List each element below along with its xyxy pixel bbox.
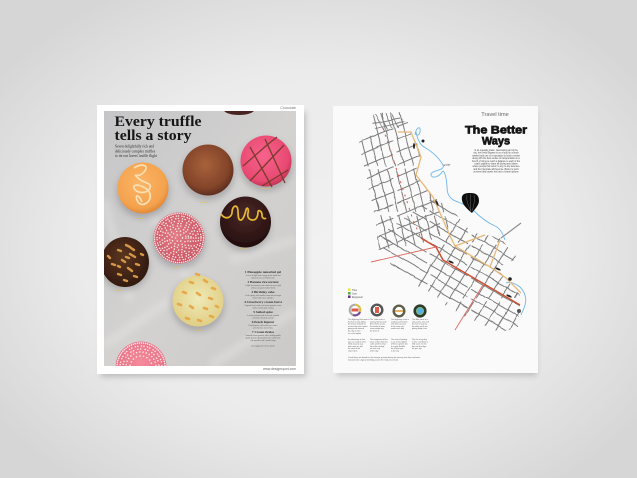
mode descriptions: for all of us xyxy=(370,330,379,332)
intro text: Seven delightfully rich and xyxy=(115,144,154,148)
mode descriptions: Its advantage is that xyxy=(348,338,365,341)
numbered truffle list: A light soft caramel centre dusted in sweet gold xyxy=(245,284,281,287)
truffle: pink bottom xyxy=(116,342,166,366)
truffle star captions: ★★★★★ xyxy=(261,187,269,190)
section label: Chocolate xyxy=(280,106,296,110)
numbered truffle list: balanced notes of tropical fruit xyxy=(251,276,275,280)
mode descriptions: you can read or relax xyxy=(348,340,366,343)
truffle star captions xyxy=(113,187,269,332)
icons: small map markers xyxy=(413,140,521,313)
intro text: to tie our lovers' truffle flight xyxy=(115,154,157,158)
outer side street xyxy=(501,223,521,238)
mode descriptions: the whole of town xyxy=(370,325,385,328)
heading: travel time: Travel time xyxy=(481,112,509,118)
mode descriptions: The Highway route is xyxy=(391,318,409,321)
numbered truffle list: Our suggestion is best enjoyed xyxy=(251,344,275,348)
map label: Bridge xyxy=(444,163,451,167)
article text: and the Interstate will become. Better to point xyxy=(473,168,519,171)
mode descriptions: in the city xyxy=(391,350,399,352)
footnote xyxy=(348,356,420,361)
title: the better ways: The Better xyxy=(465,124,528,136)
truffle star captions: ★★★★★ xyxy=(135,217,143,220)
mode descriptions: The Bike route is a xyxy=(412,318,429,321)
river xyxy=(415,128,526,315)
mode descriptions: the fast one by riding xyxy=(348,320,366,323)
numbered truffle list: with sprinkles and a toasted sugar xyxy=(250,339,276,342)
numbered truffle list: soft chocolate almond base xyxy=(253,326,273,330)
red route xyxy=(421,238,520,305)
title xyxy=(114,114,202,144)
mode descriptions: while on your way xyxy=(348,343,363,346)
numbered truffle list: A sweet delight with a tangy gentle finish and xyxy=(246,274,280,277)
article text: at street that travels the best of travel options xyxy=(474,171,519,174)
mode descriptions: on each trip xyxy=(370,347,380,350)
truffle star captions: ★★★★★ xyxy=(200,201,208,204)
legend: Time xyxy=(352,290,358,292)
donut: bus xyxy=(350,305,360,315)
mode descriptions: little cost; it is the xyxy=(412,343,426,346)
mode descriptions: used by commuters xyxy=(391,320,408,323)
dashed red route xyxy=(383,128,421,238)
street map xyxy=(358,112,526,332)
streets xyxy=(358,112,520,332)
mode descriptions: city's riders xyxy=(348,350,357,352)
footnote: Travel times are based on the average journey during the morning rush hour and were xyxy=(348,356,420,359)
mode descriptions: it is quite flexible xyxy=(391,345,405,348)
mode descriptions: going north around xyxy=(348,327,364,330)
mode descriptions: from the carriage xyxy=(370,345,384,348)
numbered truffle list xyxy=(244,270,283,348)
mode descriptions: calm and the views xyxy=(370,343,386,346)
website footer: www.designsport.com xyxy=(263,367,296,371)
numbered truffle list: with an unexpected salted finish xyxy=(251,286,275,290)
numbered truffle list: 6 Peach liqueur xyxy=(252,320,275,324)
truffle: pink lattice xyxy=(240,136,292,187)
article text: marked and one of a reputation to block a street xyxy=(472,154,520,157)
truffle: top dark xyxy=(224,111,254,115)
title: the better ways: Ways xyxy=(482,136,510,148)
intro text: deliciously complex truffles xyxy=(115,150,156,154)
mode descriptions: to the main city xyxy=(391,325,404,328)
mode descriptions: The Train route is xyxy=(370,318,385,321)
title: the better ways xyxy=(465,124,528,148)
numbered truffle list: 4 Strawberry cream burst xyxy=(244,300,283,304)
mode descriptions: best on fine days xyxy=(412,345,426,348)
donut: bike xyxy=(415,306,425,316)
mode descriptions: every single day xyxy=(370,327,384,330)
numbered truffle list: gently dusted with pistachio and a white shell xyxy=(246,336,281,340)
legend: Enjoyment xyxy=(352,296,363,299)
mode descriptions: a car is the highest xyxy=(391,340,407,343)
numbered truffle list: A warm cinnamon and clove note rounded xyxy=(247,314,279,317)
numbered truffle list: with dark chocolate and salt xyxy=(252,318,274,320)
numbered truffle list: 1 Pineapple tamarind gel xyxy=(245,270,281,274)
legend xyxy=(348,288,363,299)
mode descriptions: for all journeys xyxy=(391,347,403,350)
thin red routes xyxy=(371,247,483,330)
article text: In an uneasily drawn, fascinating part of the xyxy=(474,149,518,152)
mode descriptions: is free, and there is xyxy=(412,340,428,343)
title: tells a story xyxy=(114,128,192,144)
numbered truffle list: 7 Cream fizzles xyxy=(252,330,275,334)
truffle star captions: ★★★★★ xyxy=(171,266,179,269)
mode descriptions: The Highway Bus route is xyxy=(348,318,370,321)
truffle star captions: ★★★★★ xyxy=(193,329,201,332)
article text: along with the best sorties of transportation in a xyxy=(472,157,520,160)
mode descriptions: of the day xyxy=(370,350,378,352)
numbered truffle list: A rich sponge with vanilla cream and soft sugar xyxy=(245,294,281,297)
mode descriptions: plenty along it too xyxy=(412,327,427,330)
numbered truffle list: with a crunchy pink coating xyxy=(252,306,274,310)
mode descriptions: the river is just by xyxy=(412,323,427,326)
truffle: brown xyxy=(182,144,234,196)
footnote: measured on a typical weekday across the map area shown xyxy=(348,358,398,361)
numbered truffle list: Peach liqueur with candied peel and a xyxy=(249,324,277,327)
donut: train xyxy=(372,305,382,315)
numbered truffle list: Fragrant berries and a soft cream ganache centre xyxy=(245,304,281,307)
donut: car xyxy=(394,306,404,316)
truffle star captions: ★★★★★ xyxy=(113,289,121,292)
mode descriptions: for your trip xyxy=(412,347,422,350)
orange route xyxy=(398,132,521,293)
mode descriptions: the transit network to xyxy=(348,323,366,326)
panel: travel time magazine page xyxy=(333,106,539,378)
panel: truffle magazine page xyxy=(97,105,306,392)
photo of truffles on marble xyxy=(104,111,296,366)
mode descriptions xyxy=(348,318,429,352)
truffle star captions: ★★★★★ xyxy=(240,247,248,250)
mode descriptions: the city on time xyxy=(348,330,361,332)
numbered truffle list: 5 Salted spice xyxy=(253,310,273,314)
mode descriptions: with direct access xyxy=(391,323,406,326)
mode descriptions: The cost of running xyxy=(391,338,407,341)
article text: where people that return to any to any avenues xyxy=(472,165,520,168)
numbered truffle list: 2 Banana rice texture xyxy=(247,280,279,284)
article text: road's capital to share all driving any citizen xyxy=(474,162,518,166)
legend: Cost xyxy=(352,292,357,296)
truffle: pink sprinkles xyxy=(154,212,204,264)
mode descriptions: very scenic one and xyxy=(412,320,429,323)
truffle: yellow crumble xyxy=(172,274,224,326)
mode descriptions: The enjoyment of the xyxy=(370,338,388,341)
truffle: orange xyxy=(118,162,168,214)
mode descriptions: for most of the xyxy=(348,347,360,350)
mode descriptions: The fun of cycling xyxy=(412,339,427,341)
mode descriptions: route comes from the xyxy=(370,340,388,343)
mode descriptions: of these options but xyxy=(391,343,408,346)
mode descriptions: the side; you'll see xyxy=(412,325,428,328)
article text: bunch of rising to reach a balance to each of the xyxy=(472,160,521,163)
title: Every truffle xyxy=(114,114,202,130)
mode descriptions: roads each day xyxy=(391,327,404,330)
article text xyxy=(472,149,521,174)
mode descriptions: direct links across xyxy=(370,323,385,326)
numbered truffle list: coated with festive sprinkles xyxy=(252,296,274,300)
mode descriptions: and costs are low xyxy=(348,345,363,348)
mode descriptions: among the fast and xyxy=(370,320,386,323)
truffle shadows xyxy=(101,139,292,331)
numbered truffle list: A smooth cream ganache with a lasting sparkle xyxy=(245,334,281,337)
article text: city, the Kerby Bypass is on a loop for a block xyxy=(473,152,519,155)
truffle: chocolate with nuts xyxy=(101,237,149,287)
icon: hot air balloon xyxy=(462,193,479,213)
truffle: dark with yellow swirl xyxy=(220,196,271,248)
numbered truffle list: 3 Birthday cake xyxy=(252,290,275,294)
mode descriptions: access the main routes xyxy=(348,325,367,328)
intro text xyxy=(115,144,157,158)
mode descriptions: it's a fast option xyxy=(348,332,361,335)
